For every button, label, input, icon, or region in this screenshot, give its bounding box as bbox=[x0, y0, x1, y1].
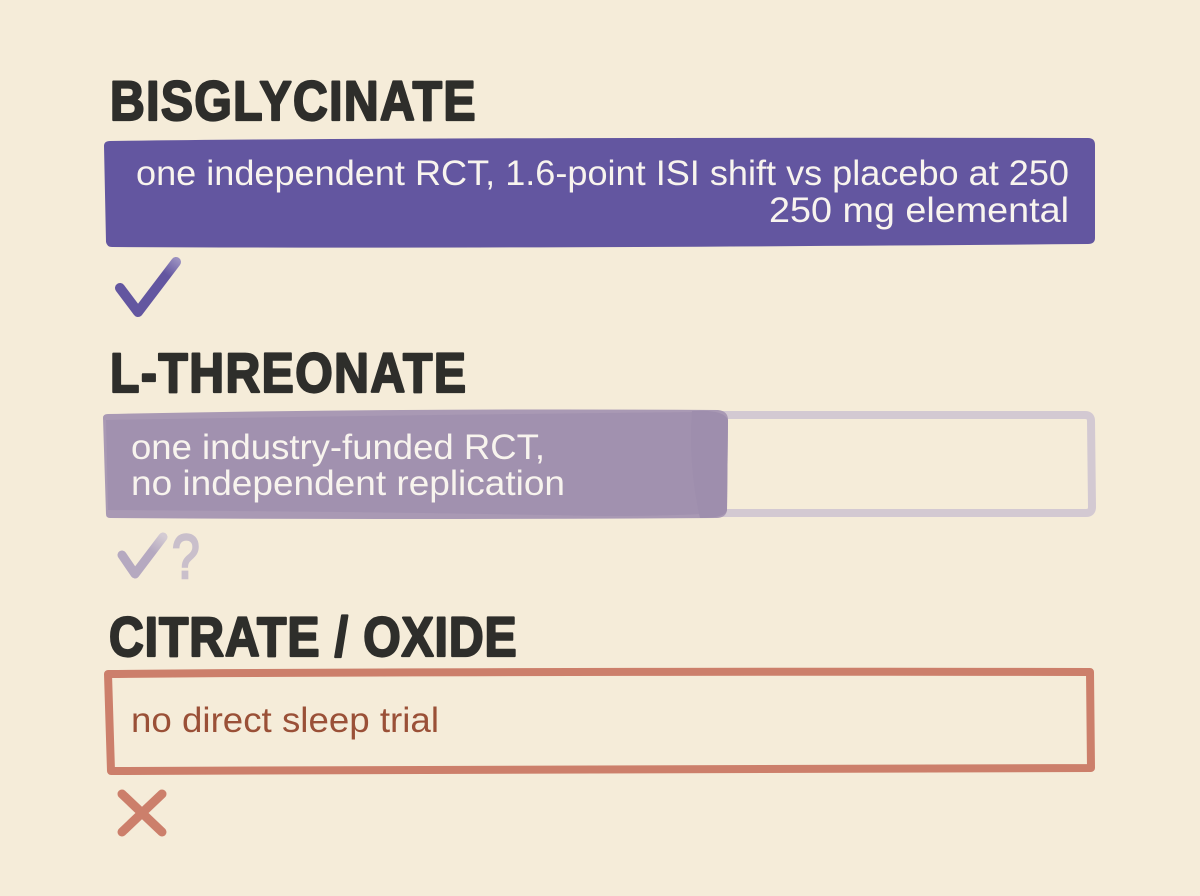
bar: partial muted purple fill bbox=[103, 410, 728, 519]
section: citrate / oxide bbox=[108, 607, 1091, 832]
bar track: outline bbox=[700, 415, 1092, 513]
icon: check mark bbox=[120, 262, 176, 312]
heading: l-threonate: L-THREONATE bbox=[110, 343, 466, 405]
bar text: no direct sleep trial bbox=[131, 701, 439, 740]
section: l-threonate bbox=[103, 343, 1092, 591]
bar: full purple evidence bar bbox=[104, 138, 1095, 248]
heading: bisglycinate: BISGLYCINATE bbox=[110, 71, 475, 133]
bar: empty red outline bbox=[108, 672, 1091, 771]
icon: cross mark bbox=[122, 794, 162, 832]
bar text bbox=[131, 428, 565, 503]
heading: citrate / oxide: CITRATE / OXIDE bbox=[109, 607, 517, 669]
bar text: 250 mg elemental bbox=[769, 191, 1069, 230]
bar text: no independent replication bbox=[131, 464, 565, 503]
bar text bbox=[136, 154, 1069, 230]
section: bisglycinate bbox=[104, 71, 1095, 312]
bar text: one independent RCT, 1.6-point ISI shift vs placebo at 250 bbox=[136, 154, 1069, 193]
bar text: one industry-funded RCT, bbox=[131, 428, 545, 467]
icon: faded check mark with question mark: ? bbox=[172, 522, 200, 591]
icon: faded check mark with question mark bbox=[122, 522, 200, 591]
